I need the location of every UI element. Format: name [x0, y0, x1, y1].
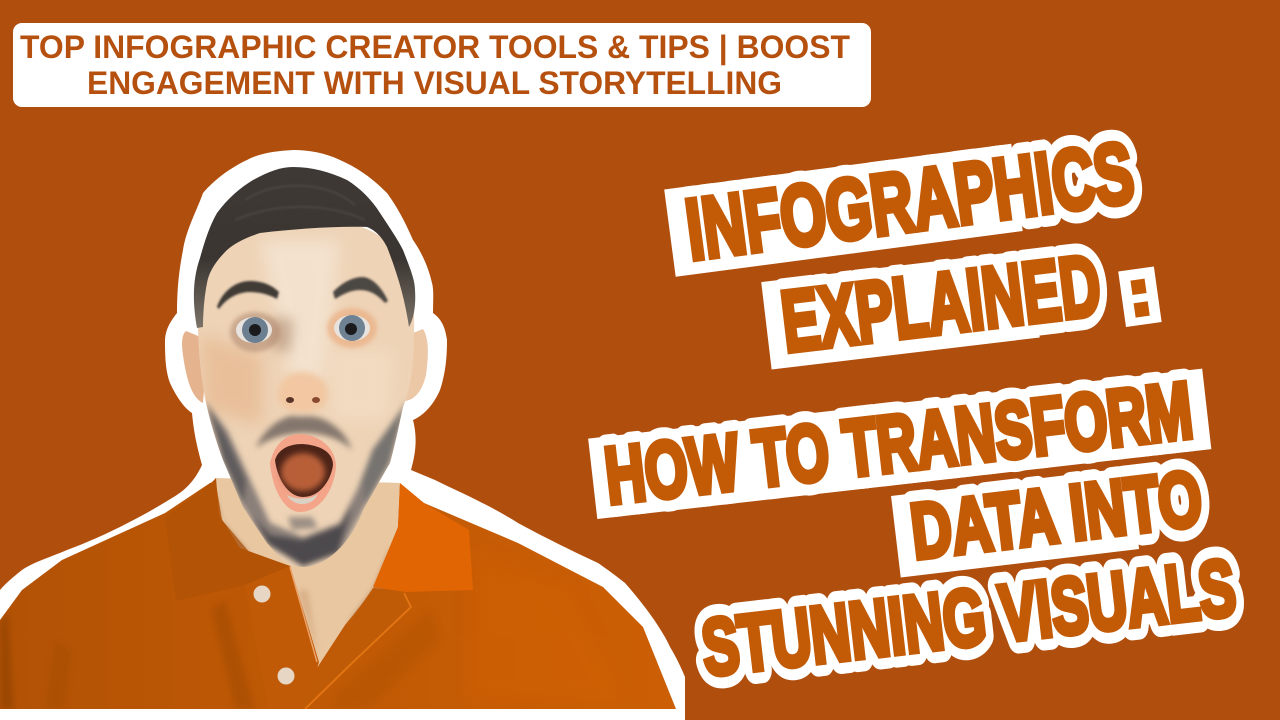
- white sticker outline: [0, 150, 685, 720]
- left eye: [230, 312, 280, 352]
- headline: explained: [761, 237, 1106, 372]
- headline: explained: EXPLAINED: [777, 237, 1106, 371]
- icon: shirt button top: [254, 586, 270, 602]
- headline: infographics: [664, 125, 1139, 281]
- title line 1: TOP INFOGRAPHIC CREATOR TOOLS & TIPS | BOOST: [20, 29, 850, 65]
- right eye: [327, 308, 377, 348]
- mouth: [270, 434, 336, 512]
- neck: [215, 478, 400, 668]
- title banner: [13, 23, 871, 107]
- placket left: [245, 566, 319, 709]
- headline: colon: :: [1125, 258, 1154, 329]
- right eyebrow: [333, 277, 388, 303]
- collar left: [165, 478, 290, 601]
- collar right: [373, 483, 473, 592]
- shirt: [0, 480, 676, 709]
- hair: [194, 167, 415, 328]
- left ear: [182, 331, 208, 403]
- icon: shirt button bottom: [278, 668, 294, 684]
- placket right: [300, 588, 411, 709]
- right ear: [405, 329, 428, 401]
- beard: [204, 400, 408, 567]
- headline: data into: [890, 454, 1207, 577]
- nose: [286, 397, 320, 403]
- mustache: [256, 416, 352, 450]
- person illustration: [0, 150, 685, 720]
- left eyebrow: [217, 281, 279, 309]
- headline: explained: EXPLAINED: [777, 237, 1106, 371]
- white strip at base: [0, 709, 685, 720]
- face: [198, 226, 414, 567]
- headline: colon: [1117, 257, 1162, 330]
- title line 2: ENGAGEMENT WITH VISUAL STORYTELLING: [87, 65, 782, 101]
